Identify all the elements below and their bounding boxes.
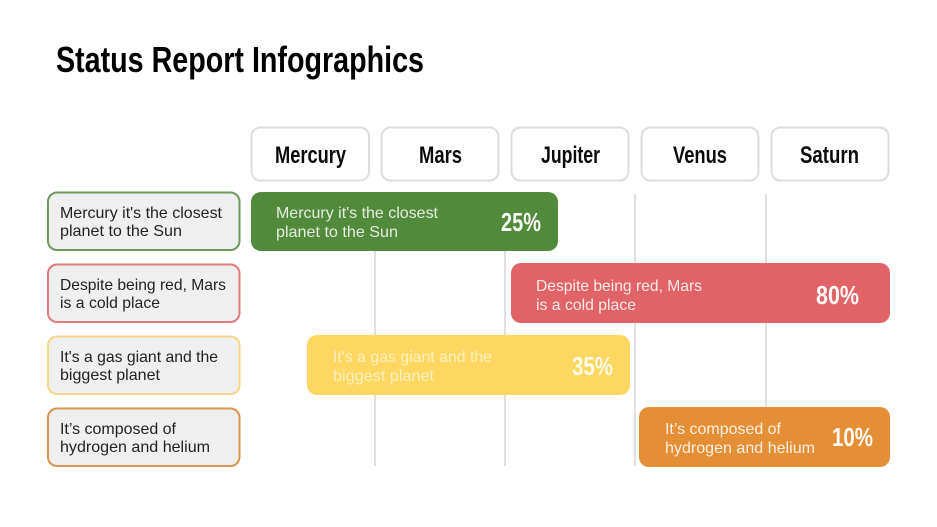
column headers: [252, 128, 888, 180]
label: Mars: Despite being red, Mars: [60, 277, 226, 294]
label: Jupiter: It's a gas giant and the: [60, 349, 218, 366]
header: Mars: [382, 128, 498, 180]
header: Saturn: [772, 128, 888, 180]
bar: Mars 80%: Despite being red, Mars: [536, 278, 702, 295]
header: Venus: [642, 128, 758, 180]
title: Status Report Infographics: [56, 39, 424, 80]
bar: Jupiter 35%: [307, 335, 630, 395]
header: Jupiter: [512, 128, 628, 180]
bar: Mercury 25%: 25%: [501, 207, 541, 237]
header: Mercury: Mercury: [275, 142, 346, 169]
bar: Mercury 25%: planet to the Sun: [276, 224, 398, 241]
bar: Mercury 25%: Mercury it's the closest: [276, 205, 439, 222]
label: Mercury: [48, 192, 240, 250]
header: Saturn: Saturn: [800, 142, 859, 169]
header: Mercury: [252, 128, 369, 180]
header: Venus: Venus: [673, 142, 727, 169]
bar: Venus 10%: [639, 407, 890, 467]
bar: Mars 80%: 80%: [816, 280, 859, 310]
label: Venus: It’s composed of: [60, 421, 177, 438]
label: Venus: hydrogen and helium: [60, 439, 210, 456]
label: Mercury: Mercury it's the closest: [60, 205, 223, 222]
bar: Venus 10%: It’s composed of: [665, 421, 782, 438]
bar: Venus 10%: hydrogen and helium: [665, 440, 815, 457]
bar: Mercury 25%: [251, 192, 558, 251]
header: Mars: Mars: [419, 142, 462, 169]
label: Mercury: planet to the Sun: [60, 223, 182, 240]
row labels: [48, 192, 240, 466]
label: Jupiter: [48, 336, 240, 394]
bar: Mars 80%: [511, 263, 890, 323]
bar: Jupiter 35%: It's a gas giant and the: [333, 349, 492, 366]
bar: Jupiter 35%: 35%: [572, 351, 613, 381]
bar: Jupiter 35%: biggest planet: [333, 368, 435, 385]
label: Mars: [48, 264, 240, 322]
bar: Venus 10%: 10%: [832, 422, 873, 452]
label: Venus: [48, 408, 240, 466]
header: Jupiter: Jupiter: [541, 142, 600, 169]
label: Jupiter: biggest planet: [60, 367, 161, 384]
label: Mars: is a cold place: [60, 295, 160, 312]
gantt bars: [251, 192, 890, 467]
bar: Mars 80%: is a cold place: [536, 297, 636, 314]
